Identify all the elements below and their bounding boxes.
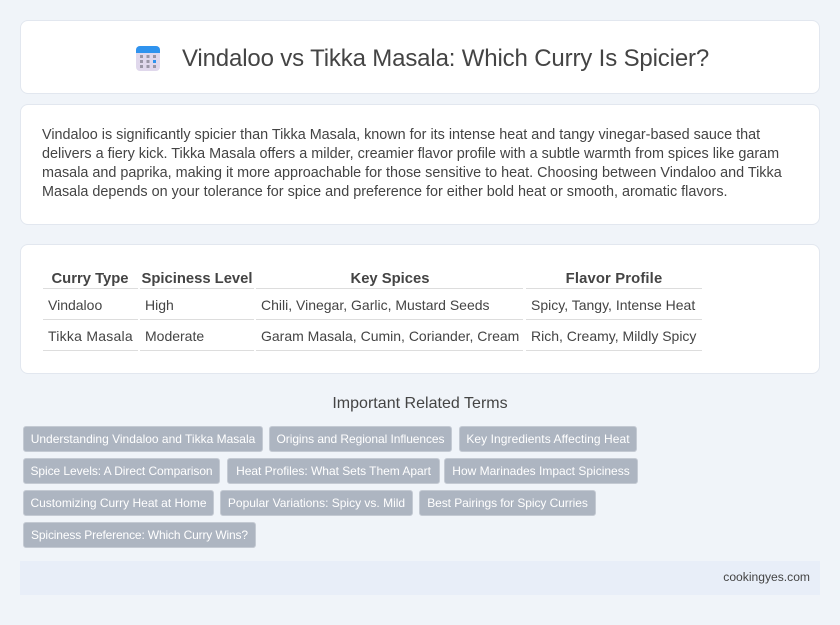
tag group: related terms: Origins and Regional Influences (277, 432, 444, 446)
row: Tikka Masala: Garam Masala, Cumin, Coriander, Cream (261, 328, 519, 344)
title text: Vindaloo vs Tikka Masala: Which Curry Is Spicier? (182, 45, 709, 72)
row: Tikka Masala: Moderate (145, 328, 204, 344)
row: Tikka Masala: Rich, Creamy, Mildly Spicy (531, 328, 696, 344)
description text: masala and paprika, making it more approachable for those sensitive to heat. Choosing between Vindaloo and Tikka (42, 165, 782, 181)
table header: Flavor Profile (566, 271, 662, 287)
table header: Key Spices (351, 271, 429, 287)
tag group: related terms: How Marinades Impact Spiciness (452, 464, 630, 478)
description text: delivers a fiery kick. Tikka Masala offers a milder, creamier flavor profile with a subtle warmth from spices like garam (42, 146, 779, 162)
tag group: related terms: Heat Profiles: What Sets Them Apart (236, 464, 431, 478)
description text (42, 127, 782, 200)
tag group: related terms: Key Ingredients Affecting Heat (466, 432, 630, 446)
row: Vindaloo: Spicy, Tangy, Intense Heat (531, 297, 695, 313)
description text: Vindaloo is significantly spicier than Tikka Masala, known for its intense heat and tangy vinegar-based sauce that (42, 127, 760, 143)
row: Tikka Masala: Tikka Masala (48, 328, 133, 344)
tag group: related terms: Customizing Curry Heat at Home (30, 496, 207, 510)
description text: Masala depends on your tolerance for spice and preference for either bold heat or smooth, aromatic flavors. (42, 184, 728, 200)
tag group: related terms: Spiciness Preference: Which Curry Wins? (31, 528, 248, 542)
tag group: related terms: Spice Levels: A Direct Comparison (30, 464, 213, 478)
icon: calendar (136, 46, 160, 71)
tag group: related terms: Best Pairings for Spicy Curries (427, 496, 588, 510)
panel: description (20, 104, 820, 225)
table header (51, 271, 662, 287)
tag group: related terms (23, 426, 638, 548)
tag group: related terms: Popular Variations: Spicy vs. Mild (228, 496, 405, 510)
panel: title (20, 20, 820, 94)
tag group: related terms: Understanding Vindaloo and Tikka Masala (31, 432, 255, 446)
row: Vindaloo: High (145, 297, 174, 313)
footer source text: cookingyes.com (723, 570, 810, 584)
heading: related terms: Important Related Terms (332, 395, 508, 412)
row: Tikka Masala (48, 328, 696, 344)
table header: Spiciness Level (141, 271, 253, 287)
table header: Curry Type (51, 271, 129, 287)
row: Vindaloo (48, 297, 696, 313)
footer (20, 561, 820, 595)
panel: comparison table (20, 244, 820, 374)
row: Vindaloo: Vindaloo (48, 297, 102, 313)
row: Vindaloo: Chili, Vinegar, Garlic, Mustard Seeds (261, 297, 490, 313)
